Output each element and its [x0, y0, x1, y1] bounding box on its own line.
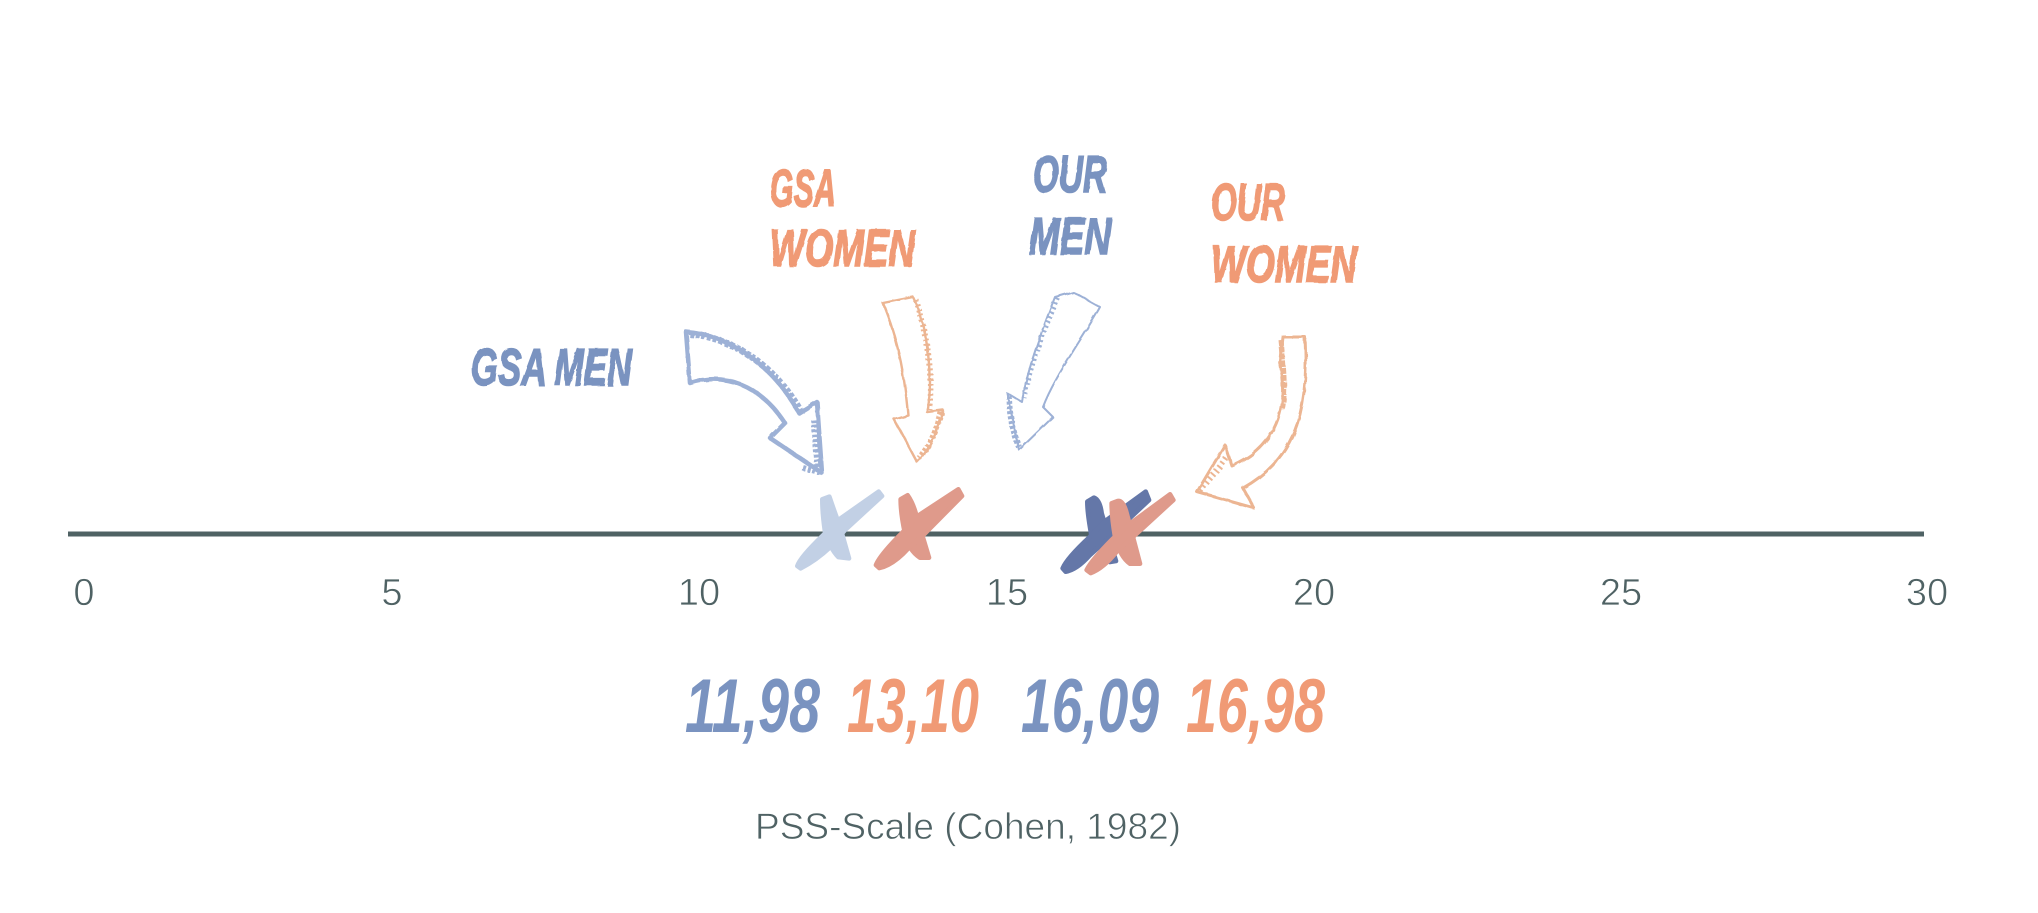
axis tick labels: 15	[986, 572, 1028, 614]
axis tick labels: 20	[1293, 572, 1335, 614]
value: 11,98: 11,98	[685, 664, 821, 749]
value: 16,09: 16,09	[1021, 664, 1159, 749]
label: our women: WOMEN	[1211, 236, 1358, 294]
label: our women: OUR	[1211, 174, 1285, 232]
value: 16,98: 16,98	[1186, 664, 1326, 749]
label: our women	[1211, 174, 1358, 294]
marker: our women	[1087, 494, 1173, 573]
label: our men: OUR	[1033, 146, 1107, 204]
marker: our men	[1063, 492, 1149, 572]
axis tick labels	[73, 572, 1948, 614]
axis tick labels: 0	[73, 572, 95, 614]
label: GSA women: GSA	[770, 160, 836, 218]
label: our men: MEN	[1029, 208, 1112, 266]
value: 13,10: 13,10	[847, 664, 979, 749]
arrow: our women	[1197, 337, 1306, 508]
axis tick labels: 5	[381, 572, 403, 614]
axis tick labels: 10	[678, 572, 720, 614]
arrow: GSA women	[883, 297, 943, 462]
axis caption: PSS-Scale (Cohen, 1982)	[755, 806, 1181, 847]
label: our men	[1029, 146, 1112, 266]
axis tick labels: 30	[1906, 572, 1948, 614]
label: GSA women	[770, 160, 916, 278]
label: GSA women: WOMEN	[770, 220, 916, 278]
arrow: our men	[1007, 292, 1100, 450]
marker: GSA women	[876, 489, 962, 568]
axis line	[68, 532, 1924, 536]
axis tick labels: 25	[1600, 572, 1642, 614]
marker: GSA men	[797, 492, 882, 568]
arrow: GSA men	[686, 332, 822, 473]
label: GSA men: GSA MEN	[471, 339, 633, 397]
